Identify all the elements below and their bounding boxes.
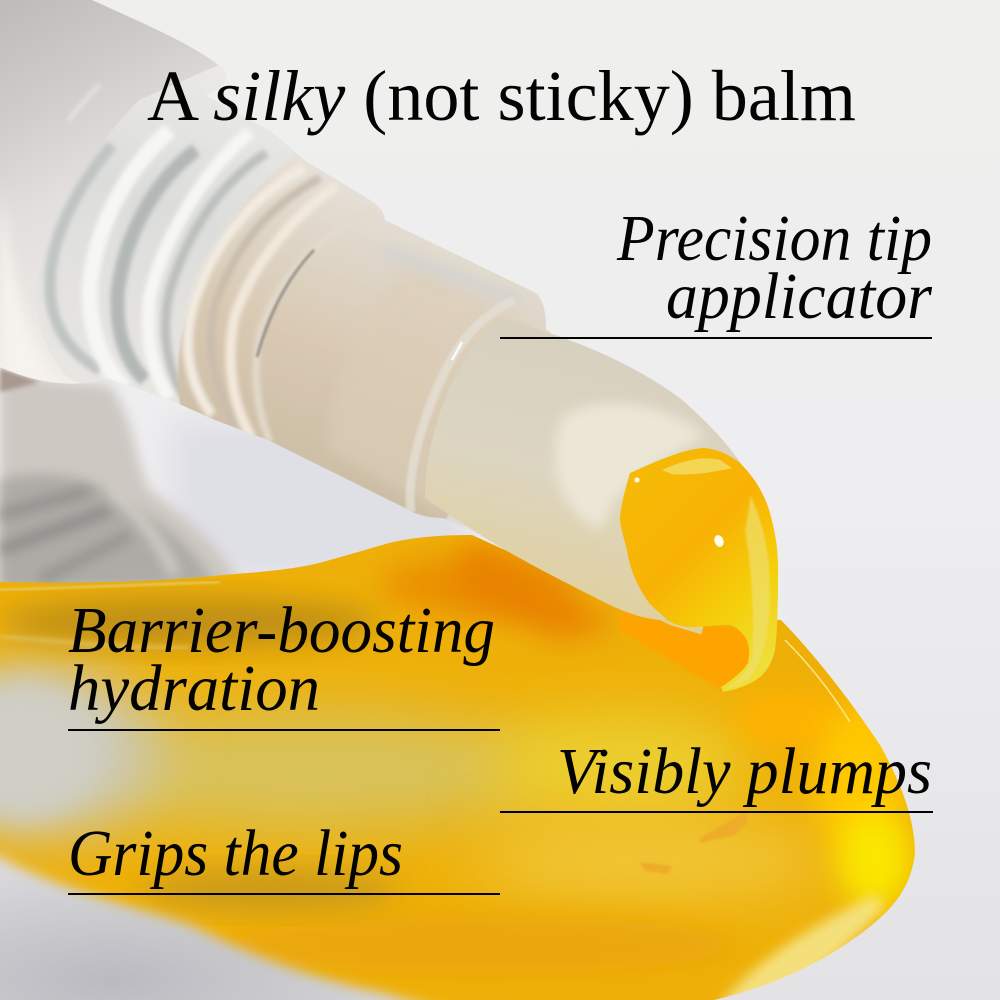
transparent collar [178,150,550,530]
label: precision tip applicator: Precision tip [616,202,932,275]
smear shading [0,540,913,1000]
label: barrier-boosting hydration: hydration [68,652,320,725]
threaded neck [68,65,295,404]
label: precision tip applicator [500,202,932,339]
table reflection of tube [0,368,240,590]
title: A silky (not sticky) balm [147,56,856,136]
balm on tip [620,448,778,692]
label: grips the lips: Grips the lips [68,817,403,890]
label: visibly plumps: Visibly plumps [557,735,932,808]
tube and applicator [0,0,778,692]
orange underside below tip [620,612,752,692]
balm smear [0,535,915,1000]
label: precision tip applicator: applicator [666,260,932,333]
label: barrier-boosting hydration [68,594,500,731]
label: barrier-boosting hydration: Barrier-boosting [68,594,495,667]
tube body [0,0,218,384]
blob highlights [634,458,770,689]
soft tip [425,318,760,640]
